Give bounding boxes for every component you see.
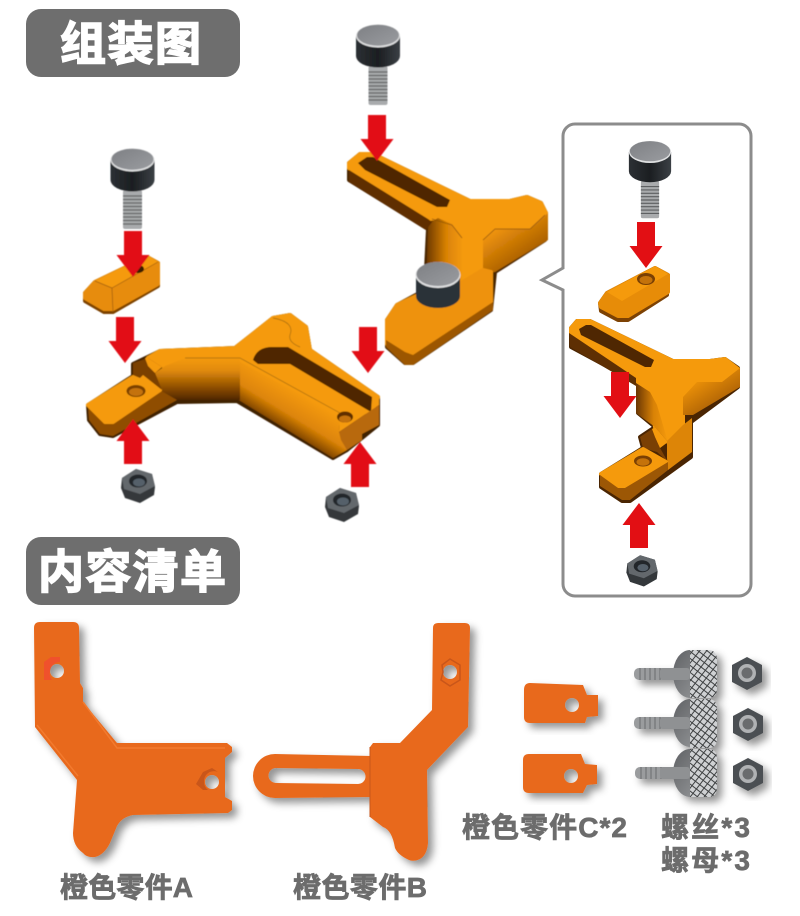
screw 3 (635, 749, 717, 797)
nut (626, 555, 658, 586)
knob seated in part (416, 262, 460, 308)
heading: contents list (26, 537, 240, 605)
screw (110, 148, 154, 229)
arrow into small part (630, 222, 662, 268)
small orange part C (600, 266, 668, 320)
label: screws: 螺丝*3 (661, 812, 750, 843)
callout panel: alternative assembly (542, 124, 751, 596)
screw (356, 24, 400, 105)
label: part A: 橙色零件A (60, 872, 193, 903)
orange part B (349, 154, 548, 365)
heading: assembly diagram (26, 9, 240, 77)
arrow onto big part (108, 317, 142, 363)
nut 2 (733, 708, 763, 741)
arrow up to part (622, 503, 656, 548)
callout outline (542, 124, 751, 596)
photo: orange part A (34, 622, 232, 857)
arrow up right nut (344, 442, 376, 487)
photo: orange part C, upper (524, 683, 598, 723)
nut left (121, 469, 155, 503)
screw 1 (634, 650, 717, 698)
arrow up left nut (116, 419, 150, 464)
label: part C: 橙色零件C*2 (462, 812, 627, 843)
small orange part C (85, 255, 158, 312)
photo: orange part B (253, 623, 470, 861)
arrow down through part (604, 372, 636, 418)
arrow into slot (360, 115, 394, 161)
label: part B: 橙色零件B (293, 872, 427, 903)
nut 3 (733, 758, 763, 791)
nut right (325, 488, 359, 522)
photo: thumb screws (634, 650, 717, 797)
heading: assembly diagram: 组装图 (60, 18, 201, 70)
heading: contents list: 内容清单 (38, 546, 226, 598)
big orange part A (88, 315, 379, 458)
photo: orange part C, lower (523, 754, 597, 793)
orange T part (569, 321, 740, 501)
screw (629, 141, 671, 218)
arrow down right side (352, 327, 384, 373)
assembly: left exploded view (85, 148, 384, 522)
photo: hex nuts (732, 657, 763, 791)
label: nuts: 螺母*3 (661, 845, 750, 876)
arrow into small part (116, 231, 150, 277)
assembly: centre exploded view (349, 24, 548, 365)
screw 2 (634, 699, 717, 748)
nut 1 (732, 657, 762, 690)
